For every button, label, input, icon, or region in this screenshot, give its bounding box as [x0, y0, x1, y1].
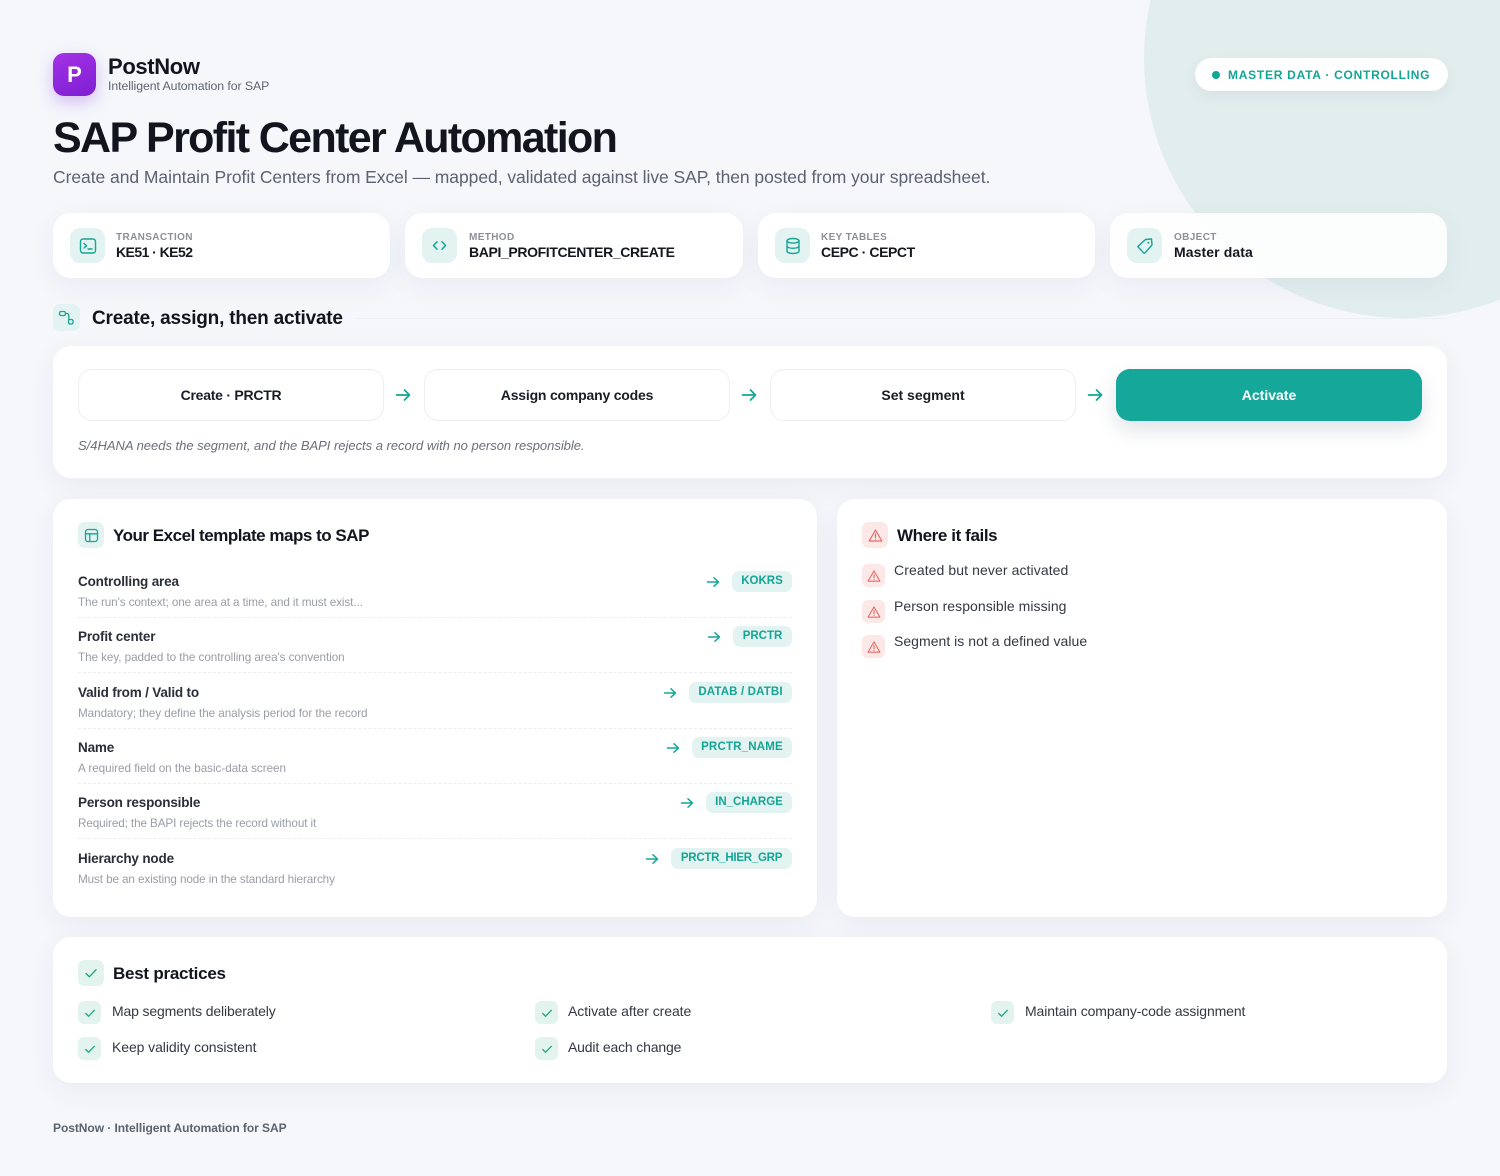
SAP field: PRCTR	[743, 630, 782, 642]
brand tagline: Intelligent Automation for SAP	[108, 79, 269, 93]
icon: code	[422, 228, 457, 263]
SAP field	[706, 792, 792, 813]
arrow	[708, 632, 720, 642]
icon: warning	[862, 564, 885, 587]
icon: check	[991, 1001, 1014, 1024]
arrow	[664, 688, 676, 698]
row description: Required; the BAPI rejects the record without it	[78, 817, 316, 830]
row description: The key, padded to the controlling area's convention	[78, 651, 345, 664]
stat card: transaction	[53, 213, 390, 278]
step: create: Create · PRCTR	[181, 387, 281, 403]
row description: The run's context; one area at a time, and it must exist...	[78, 596, 363, 609]
step: activate: Activate	[1242, 387, 1296, 403]
icon: check	[535, 1001, 558, 1024]
icon: warning	[862, 600, 885, 623]
arrow	[666, 743, 680, 753]
SAP field: PRCTR_HIER_GRP	[681, 852, 782, 864]
step: assign	[424, 369, 730, 421]
step: create	[78, 369, 384, 421]
footer: PostNow · Intelligent Automation for SAP	[53, 1121, 287, 1135]
SAP field	[689, 682, 792, 703]
row: hierarchy node: Hierarchy node	[78, 851, 174, 866]
mapping heading icon	[78, 522, 104, 548]
heading text: Create, assign, then activate	[92, 308, 343, 329]
icon: check	[78, 1037, 101, 1060]
row: valid from/to: Valid from / Valid to	[78, 685, 199, 700]
label: OBJECT	[1174, 232, 1217, 243]
practice text: Maintain company-code assignment	[1025, 1003, 1245, 1019]
arrow	[1088, 389, 1102, 401]
value: Master data	[1174, 244, 1253, 260]
step: segment	[770, 369, 1076, 421]
failure text: Person responsible missing	[894, 598, 1066, 614]
arrow	[396, 389, 410, 401]
failure text: Created but never activated	[894, 562, 1068, 578]
section heading: process	[53, 304, 343, 331]
label: METHOD	[469, 232, 515, 243]
step: assign: Assign company codes	[501, 387, 653, 403]
row: name: Name	[78, 740, 114, 755]
category badge: MASTER DATA · CONTROLLING	[1228, 68, 1430, 82]
brand logo: P	[67, 62, 82, 87]
icon: database	[775, 228, 810, 263]
arrow	[680, 798, 694, 808]
panel: best practices	[53, 937, 1447, 1083]
practice text: Map segments deliberately	[112, 1003, 276, 1019]
row: controlling area: Controlling area	[78, 574, 179, 589]
arrow	[742, 389, 756, 401]
row description: Must be an existing node in the standard hierarchy	[78, 873, 335, 886]
category badge	[1195, 58, 1448, 91]
step: segment: Set segment	[881, 387, 965, 403]
arrow	[646, 854, 658, 864]
row description: A required field on the basic-data screen	[78, 762, 286, 775]
brand name: PostNow	[108, 54, 200, 79]
label: TRANSACTION	[116, 232, 193, 243]
SAP field: KOKRS	[741, 575, 783, 587]
panel: process flow	[53, 346, 1447, 478]
panel: where it fails	[837, 499, 1447, 917]
practice text: Keep validity consistent	[112, 1039, 256, 1055]
fails heading icon	[862, 522, 888, 548]
icon: warning	[862, 635, 885, 658]
brand logo	[53, 53, 96, 96]
value: BAPI_PROFITCENTER_CREATE	[469, 244, 675, 260]
SAP field	[732, 571, 792, 592]
icon: check	[535, 1037, 558, 1060]
icon: terminal	[70, 228, 105, 263]
SAP field	[692, 737, 792, 758]
value: KE51 · KE52	[116, 244, 192, 260]
stat card: key tables	[758, 213, 1095, 278]
stat card: method	[405, 213, 743, 278]
practice text: Audit each change	[568, 1039, 681, 1055]
decorative background circle	[1144, 0, 1500, 318]
step: activate	[1116, 369, 1422, 421]
value: CEPC · CEPCT	[821, 244, 915, 260]
SAP field: PRCTR_NAME	[701, 741, 783, 753]
SAP field: DATAB / DATBI	[698, 686, 783, 698]
SAP field	[671, 848, 792, 869]
label: KEY TABLES	[821, 232, 887, 243]
arrow	[706, 577, 720, 587]
row: profit center: Profit center	[78, 629, 155, 644]
icon: check	[78, 1001, 101, 1024]
mapping heading: Your Excel template maps to SAP	[113, 526, 369, 545]
stat card: object	[1110, 213, 1447, 278]
process note: S/4HANA needs the segment, and the BAPI rejects a record with no person responsible.	[78, 438, 585, 453]
SAP field: IN_CHARGE	[715, 796, 783, 808]
icon: tag	[1127, 228, 1162, 263]
subtitle: Create and Maintain Profit Centers from Excel — mapped, validated against live SAP, then posted from your spreadsheet.	[53, 167, 990, 187]
icon: route	[53, 304, 80, 331]
practice text: Activate after create	[568, 1003, 691, 1019]
best practices heading: Best practices	[113, 964, 226, 983]
SAP field	[733, 626, 792, 647]
row: person responsible: Person responsible	[78, 795, 200, 810]
fails heading: Where it fails	[897, 526, 997, 545]
failure text: Segment is not a defined value	[894, 633, 1087, 649]
best practices heading icon	[78, 960, 104, 986]
title: SAP Profit Center Automation	[53, 114, 616, 162]
panel: excel mapping	[53, 499, 817, 917]
row description: Mandatory; they define the analysis period for the record	[78, 707, 368, 720]
